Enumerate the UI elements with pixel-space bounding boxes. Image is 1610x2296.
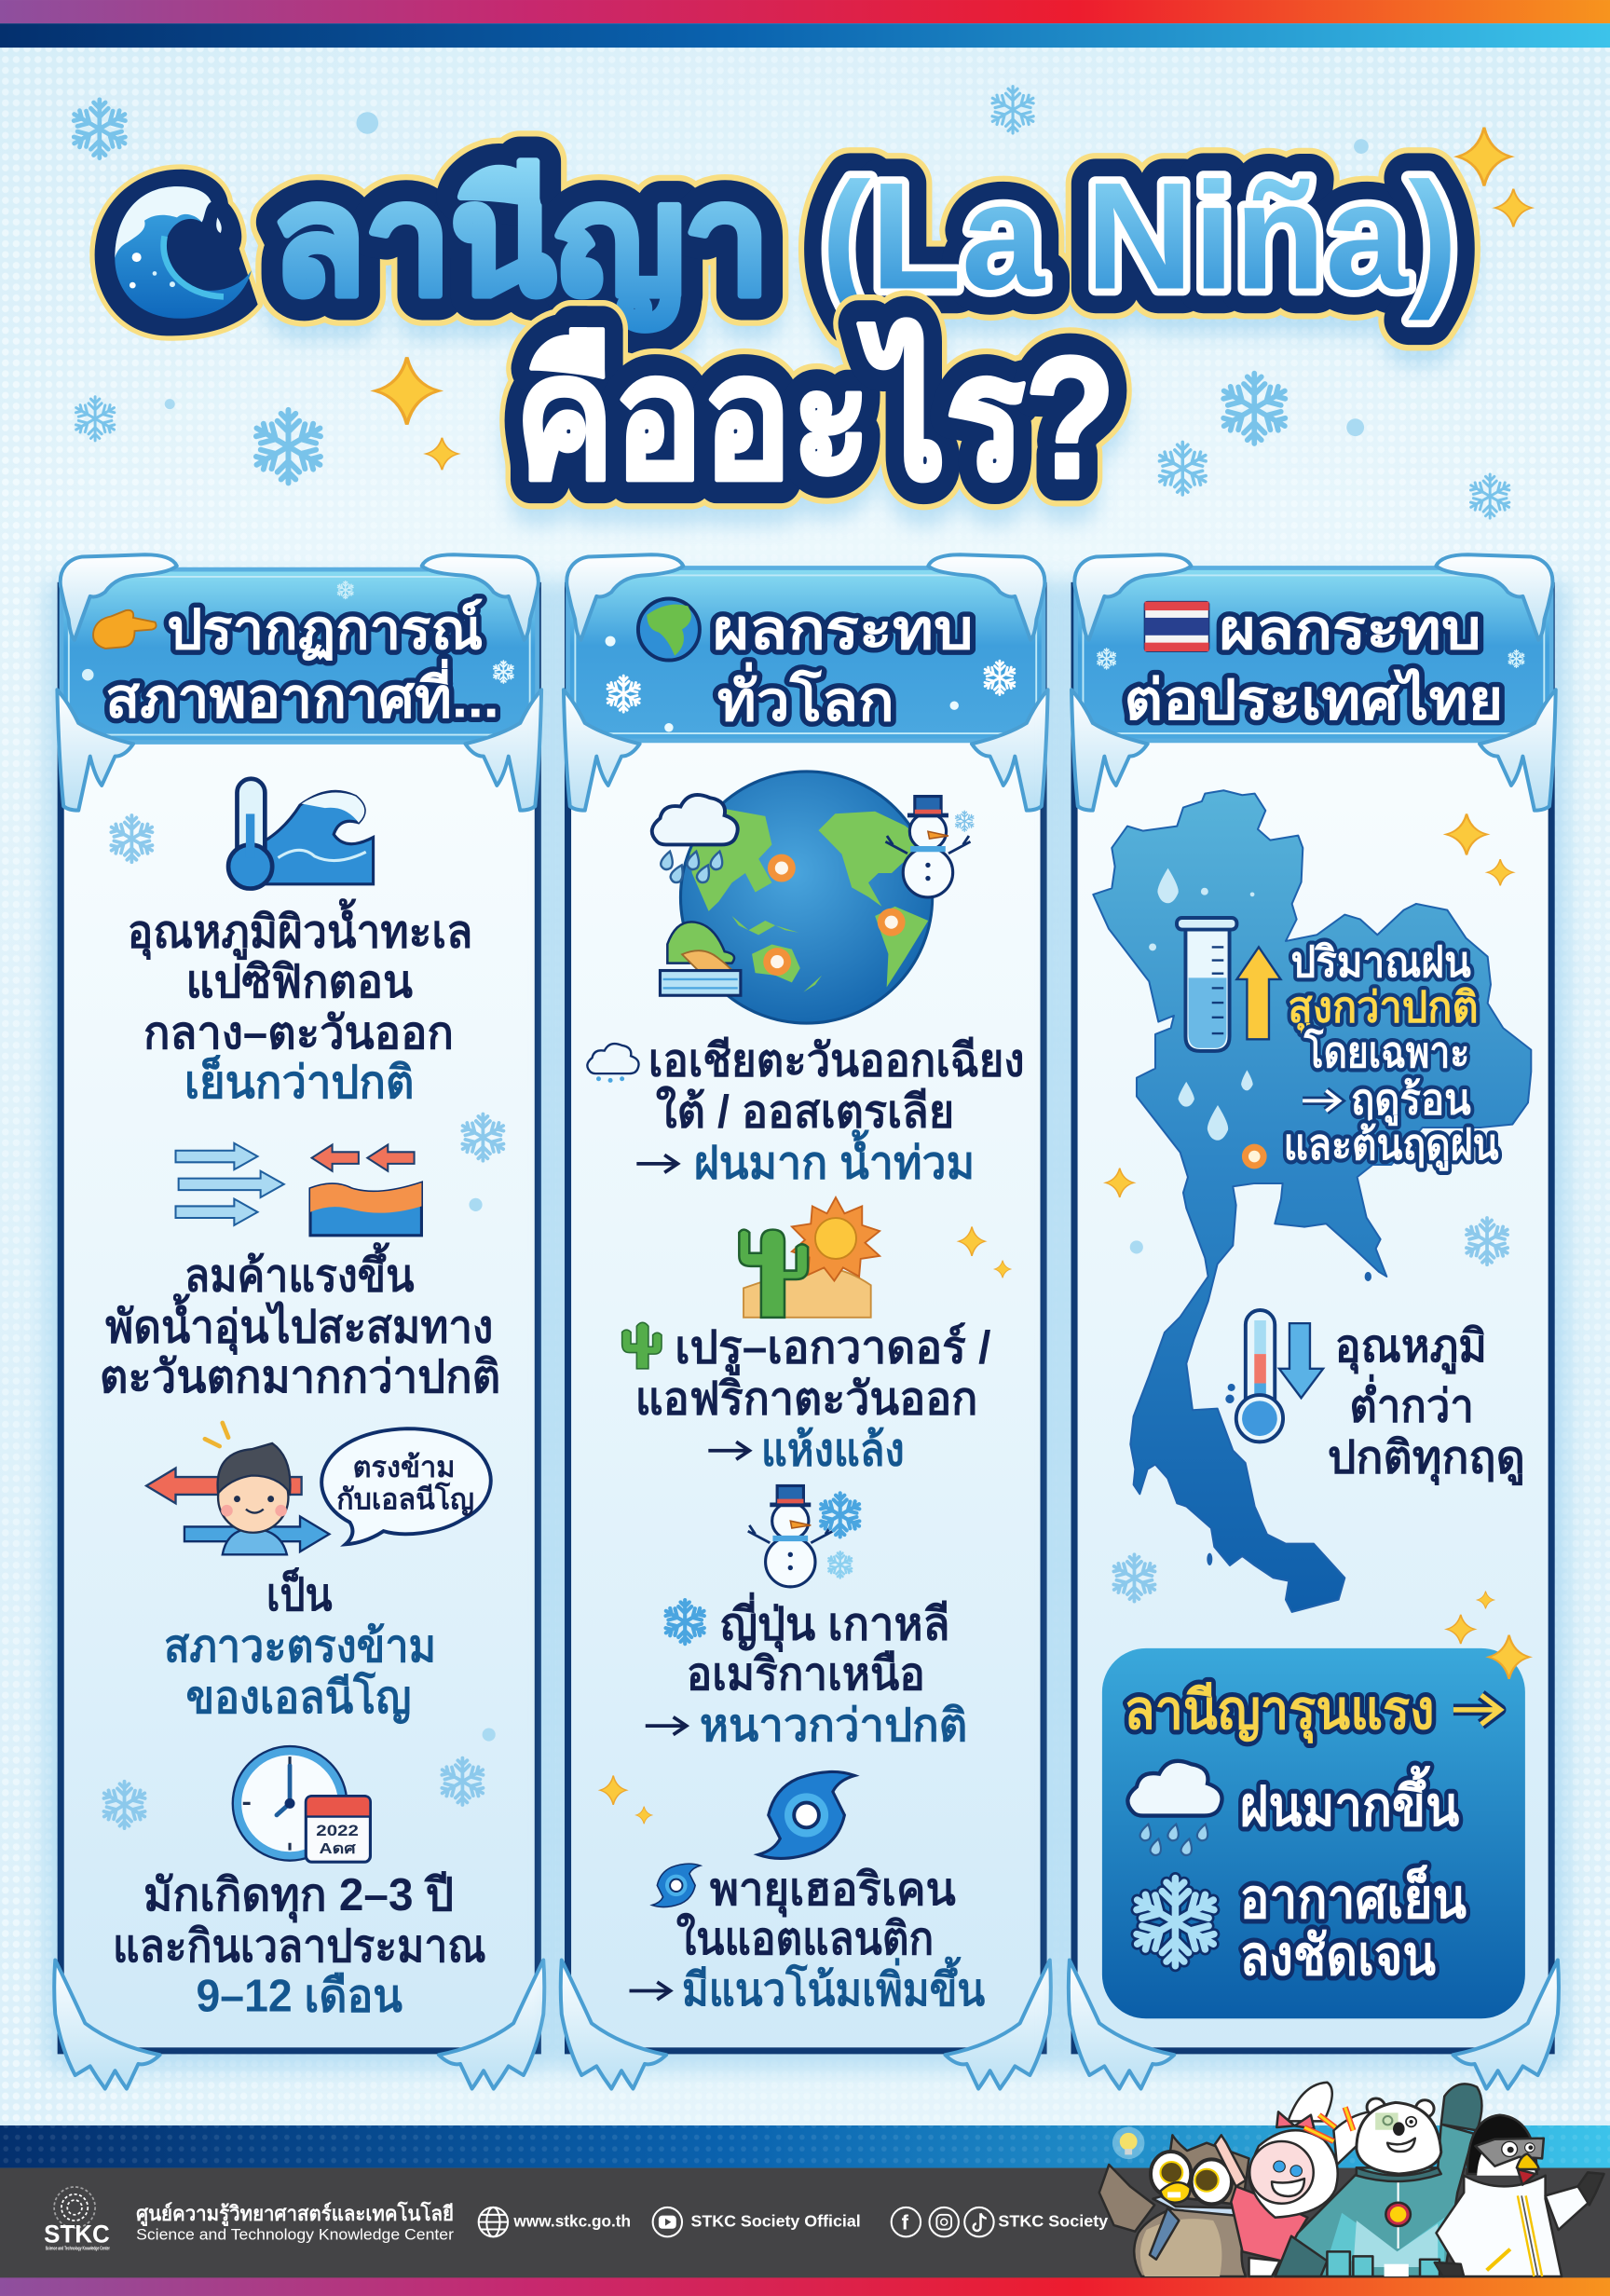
website xyxy=(479,2207,631,2236)
icon: clock and calendar: Aดศ xyxy=(319,1841,357,1857)
title line one yellow outline: ลานีญา xyxy=(272,155,770,330)
text: opposite: เป็น xyxy=(266,1566,333,1620)
icon: snowman with snowflakes xyxy=(748,1485,863,1587)
icon: cactus and sun xyxy=(739,1197,880,1318)
map droplets xyxy=(1149,868,1254,1141)
title line two: คืออะไร? xyxy=(515,319,1115,514)
icon: large snowflake xyxy=(1131,1878,1220,1966)
panel: what is La Nina xyxy=(44,554,556,2089)
arrow: rain up xyxy=(1236,947,1281,1039)
title line one: (La Niña) xyxy=(821,150,1458,321)
ice corners xyxy=(561,554,1051,2089)
panel: global impacts xyxy=(551,554,1062,2089)
icon: small cactus xyxy=(622,1322,662,1369)
map marker: Bangkok xyxy=(1242,1144,1267,1168)
title shadow: คืออะไร? xyxy=(515,339,1115,535)
social media: STKC Society xyxy=(998,2211,1109,2230)
text: rainfall: สูงกว่าปกติ xyxy=(1288,984,1479,1034)
panel header: ทั่วโลก xyxy=(717,662,894,732)
panel header: ผลกระทบ xyxy=(713,598,974,661)
text: hurricanes: ในแอตแลนติก xyxy=(676,1912,934,1964)
icon: snowman xyxy=(885,797,971,897)
top stripe xyxy=(0,0,1610,48)
callout: opposite of El Nino: ตรงข้าม xyxy=(353,1451,456,1483)
text: Japan Korea: ญี่ปุ่น เกาหลี xyxy=(720,1592,950,1652)
title line two: คืออะไร? xyxy=(515,319,1115,514)
text: Japan Korea xyxy=(646,1592,967,1751)
text: Japan Korea: หนาวกว่าปกติ xyxy=(700,1701,967,1751)
website: www.stkc.go.th xyxy=(512,2211,631,2230)
callout: severe La Nina: ลานีญารุนแรง xyxy=(1124,1680,1434,1744)
wave outline navy xyxy=(95,170,258,335)
panel header xyxy=(568,568,1044,741)
title shadow: ลานีญา xyxy=(272,175,770,350)
map of Thailand xyxy=(1093,790,1531,1612)
title shadow: (La Niña) xyxy=(821,171,1458,341)
text: temperature: ต่ำกว่า xyxy=(1349,1374,1474,1431)
title line two: คืออะไร? xyxy=(515,319,1115,514)
icon: boy with opposite arrows xyxy=(146,1423,329,1554)
text: Peru and East Africa xyxy=(622,1322,991,1475)
text: rainfall: ฤดูร้อน xyxy=(1351,1075,1471,1126)
title line one yellow outline xyxy=(272,150,1458,330)
text: trade winds xyxy=(100,1242,500,1402)
icon: rain cloud xyxy=(652,795,738,884)
title line one: ลานีญา xyxy=(272,155,770,330)
text: opposite xyxy=(164,1566,436,1724)
text: rainfall: ปริมาณฝน xyxy=(1291,938,1471,986)
organisation name xyxy=(136,2201,455,2244)
mascots xyxy=(1099,2083,1604,2276)
text: Peru and East Africa: แอฟริกาตะวันออก xyxy=(635,1374,977,1425)
icon: Thai flag xyxy=(1144,602,1209,651)
ice corners xyxy=(1069,554,1559,2089)
panel header xyxy=(61,569,538,742)
panel header xyxy=(1076,568,1551,741)
text: sea surface: อุณหภูมิผิวน้ำทะเล xyxy=(128,897,472,960)
text: opposite: สภาวะตรงข้าม xyxy=(164,1621,436,1672)
text: trade winds: พัดน้ำอุ่นไปสะสมทาง xyxy=(105,1293,493,1356)
panel header: ต่อประเทศไทย xyxy=(1124,667,1503,731)
text: sea surface: เย็นกว่าปกติ xyxy=(184,1054,415,1108)
title line one xyxy=(272,150,1458,330)
title line one: ลานีญา xyxy=(272,155,770,330)
icon: trade winds and water xyxy=(176,1143,421,1236)
icon: wave xyxy=(115,186,252,319)
icon: small rain cloud xyxy=(587,1044,639,1083)
decorative snowflakes and sparkles around title xyxy=(70,87,1532,518)
panel header: สภาพอากาศที่... xyxy=(105,659,499,730)
title shadow xyxy=(272,171,1458,535)
callout: severe La Nina: ลงชัดเจน xyxy=(1240,1924,1436,1987)
text: hurricanes xyxy=(629,1864,985,2016)
logo: Science and Technology Knowledge Center xyxy=(46,2247,110,2252)
icon: pointing hand xyxy=(93,610,157,649)
title line one: (La Niña) xyxy=(821,150,1458,321)
text: sea surface: กลาง–ตะวันออก xyxy=(143,1008,454,1059)
icon: island flood xyxy=(660,922,741,995)
mascot: owl xyxy=(1099,2135,1249,2276)
text: sea surface: แปซิฟิกตอน xyxy=(186,957,413,1007)
icon: rain cloud xyxy=(1127,1761,1222,1856)
text: recurrence: มักเกิดทุก 2–3 ปี xyxy=(143,1870,454,1923)
icon: clock and calendar xyxy=(233,1746,370,1862)
organisation name: ศูนย์ความรู้วิทยาศาสตร์และเทคโนโลยี xyxy=(136,2201,454,2227)
icon: rain gauge xyxy=(1177,918,1236,1051)
text: temperature xyxy=(1328,1321,1525,1485)
callout: severe La Nina xyxy=(1102,1635,1530,2018)
text: south east asia: ฝนมาก น้ำท่วม xyxy=(694,1129,975,1189)
text: south east asia: ใต้ / ออสเตรเลีย xyxy=(656,1086,954,1138)
callout: opposite of El Nino: กับเอลนีโญ xyxy=(336,1482,474,1517)
text: Peru and East Africa: เปรู–เอกวาดอร์ / xyxy=(675,1322,991,1376)
icon: globe xyxy=(638,599,700,660)
callout: severe La Nina: ฝนมากขึ้น xyxy=(1240,1766,1459,1838)
icon: hurricane xyxy=(758,1771,854,1858)
icon: clock and calendar: 2022 xyxy=(316,1823,359,1839)
text: Peru and East Africa: แห้งแล้ง xyxy=(761,1425,905,1475)
text: south east asia xyxy=(587,1036,1025,1189)
arrow xyxy=(1453,1695,1500,1725)
text: rainfall: และต้นฤดูฝน xyxy=(1284,1121,1499,1171)
youtube xyxy=(653,2207,861,2236)
callout: severe La Nina: อากาศเย็น xyxy=(1240,1866,1467,1930)
title xyxy=(95,150,1458,535)
decorations xyxy=(1105,813,1513,1644)
text: opposite: ของเอลนีโญ xyxy=(186,1671,411,1724)
organisation name: Science and Technology Knowledge Center xyxy=(136,2227,455,2244)
text: trade winds: ลมค้าแรงขึ้น xyxy=(184,1242,415,1302)
logo xyxy=(44,2187,110,2252)
text: temperature: ปกติทุกฤดู xyxy=(1328,1432,1525,1485)
social media: f xyxy=(902,2211,909,2234)
text: rainfall: โดยเฉพาะ xyxy=(1303,1027,1469,1076)
text: hurricanes: พายุเฮอริเคน xyxy=(710,1865,956,1918)
text: hurricanes: มีแนวโน้มเพิ่มขึ้น xyxy=(682,1956,985,2016)
title line one: (La Niña) xyxy=(821,150,1458,321)
wave outline yellow xyxy=(95,170,258,335)
icon: earth with weather xyxy=(652,772,975,1023)
arrow: temperature down xyxy=(1279,1323,1323,1398)
youtube: STKC Society Official xyxy=(690,2211,861,2230)
logo: STKC xyxy=(44,2221,110,2248)
text: sea surface xyxy=(128,897,472,1108)
text: rainfall xyxy=(1284,938,1499,1171)
mascot: rabbit xyxy=(1231,2083,1372,2276)
footer xyxy=(0,2083,1610,2296)
text: temperature: อุณหภูมิ xyxy=(1335,1321,1487,1374)
icon: thermometer and wave xyxy=(228,779,374,889)
text: recurrence xyxy=(113,1870,486,2021)
mascot: penguin xyxy=(1435,2115,1604,2276)
callout: opposite of El Nino xyxy=(321,1428,491,1544)
text: Japan Korea: อเมริกาเหนือ xyxy=(687,1649,925,1700)
light bulb xyxy=(1112,2127,1144,2159)
text: recurrence: 9–12 เดือน xyxy=(197,1971,402,2021)
text: recurrence: และกินเวลาประมาณ xyxy=(113,1921,486,1972)
title line one yellow outline: (La Niña) xyxy=(821,150,1458,321)
panel header: ผลกระทบ xyxy=(1220,598,1481,661)
text: trade winds: ตะวันตกมากกว่าปกติ xyxy=(100,1352,500,1402)
panel header: ปรากฏการณ์ xyxy=(167,598,483,661)
mascot: bear xyxy=(1275,2084,1481,2276)
panel: impacts on Thailand xyxy=(1057,554,1569,2089)
text: south east asia: เอเชียตะวันออกเฉียง xyxy=(648,1036,1025,1086)
ice corners xyxy=(54,554,544,2089)
icon: thermometer xyxy=(1236,1310,1283,1442)
social media xyxy=(892,2207,1109,2236)
